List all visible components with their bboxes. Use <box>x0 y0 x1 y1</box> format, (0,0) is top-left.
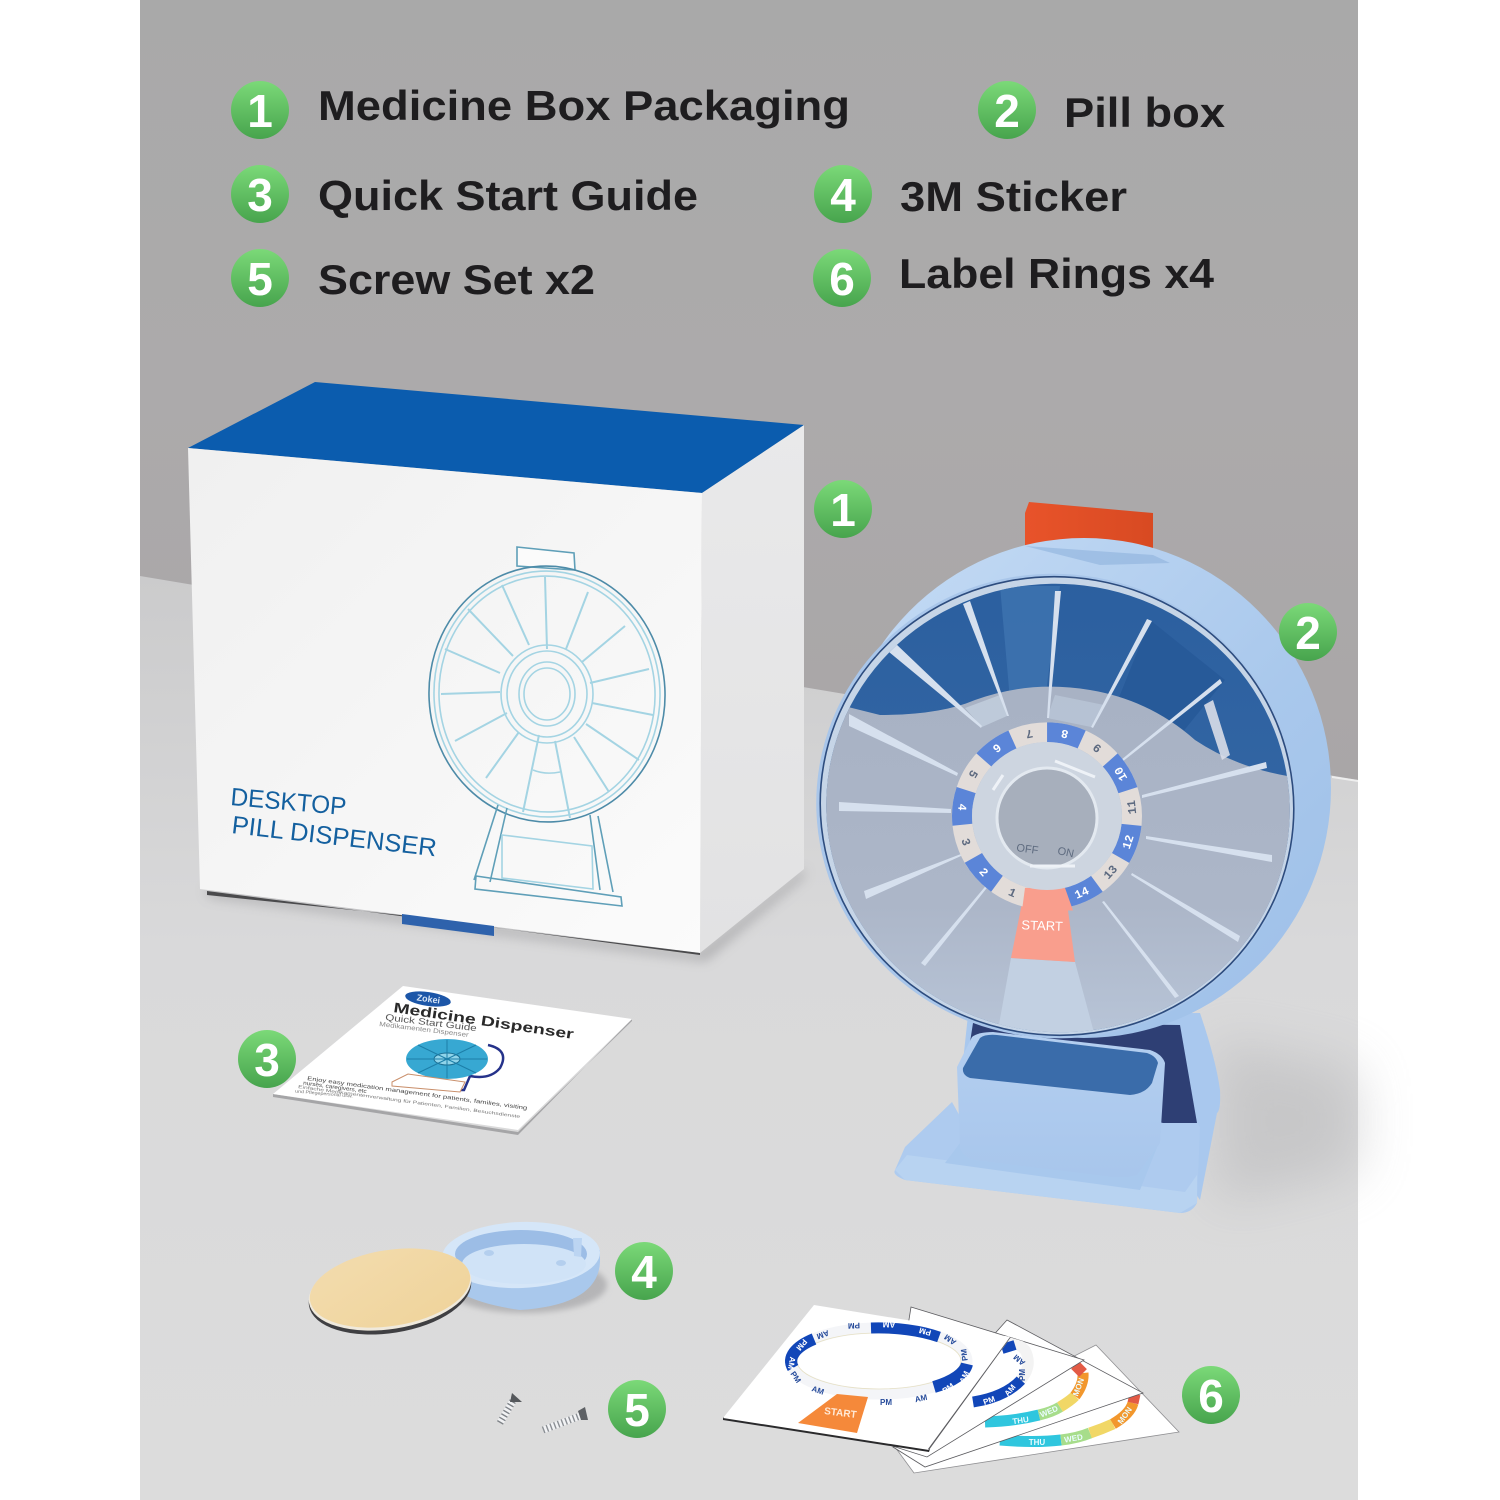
badge 5 callout <box>608 1380 666 1438</box>
box line art: pill dispenser drawing <box>422 547 672 906</box>
stand base plate <box>894 1102 1200 1213</box>
sheet one ring labels: PM <box>847 1321 860 1330</box>
white divider spokes <box>839 591 1272 998</box>
sheet two ring labels: PM <box>1018 1369 1027 1381</box>
start wedge <box>1011 888 1075 962</box>
sheet four day labels: MON <box>1116 1405 1134 1426</box>
booklet subtitle: Quick Start Guide <box>385 1012 477 1033</box>
sheet one ring labels: AM <box>958 1369 971 1385</box>
sheet one ring labels: PM <box>941 1381 956 1396</box>
ring numbers: 14 <box>1073 884 1091 903</box>
screw one <box>500 1393 522 1423</box>
sheet one ring labels: PM <box>794 1337 809 1352</box>
badge 1 callout <box>814 480 872 538</box>
box top face <box>188 382 804 493</box>
sheet three day labels: WED <box>1039 1404 1060 1419</box>
booklet body text: Einfache Medikamentenverwaltung für Patienten, Familien, Besuchsdienste <box>298 1084 521 1119</box>
legend label: 3M sticker: 3M Sticker <box>900 173 1127 220</box>
sheet four day labels: THU <box>1029 1438 1045 1447</box>
badge 4 <box>814 165 872 223</box>
3M sticker and mount <box>303 1219 607 1345</box>
booklet body text <box>295 1076 528 1119</box>
booklet sub line: Medikamenten Dispenser <box>379 1021 470 1039</box>
quick start guide booklet <box>273 986 632 1135</box>
central hub dial: ON <box>1056 845 1075 860</box>
ring numbers: 8 <box>1060 726 1070 741</box>
box side face <box>700 425 804 953</box>
sheet one ring labels: PM <box>918 1326 932 1337</box>
sheet four day labels <box>1029 1405 1134 1447</box>
ring numbers: 13 <box>1101 863 1121 883</box>
legend label: label rings: Label Rings x4 <box>899 250 1215 297</box>
ring numbers: 6 <box>989 740 1004 755</box>
badge 5: 5 <box>247 253 273 305</box>
badge 3: 3 <box>247 169 273 221</box>
badge 6 callout: 6 <box>1198 1370 1224 1422</box>
label sheet two <box>889 1307 1084 1457</box>
legend label: quick start guide: Quick Start Guide <box>318 172 698 219</box>
pill collection cup <box>957 1032 1165 1177</box>
ring on sheet one <box>791 1328 967 1394</box>
booklet logo <box>404 989 452 1009</box>
booklet wheel illustration <box>392 1039 503 1092</box>
sheet three day labels: MON <box>1071 1377 1086 1397</box>
sheet one ring labels: AM <box>815 1328 830 1341</box>
disc front rim <box>779 536 1333 1076</box>
legend label: medicine box packaging: Medicine Box Packaging <box>318 82 850 129</box>
lighter wall facets near hub <box>965 695 1007 727</box>
ring numbers: 9 <box>1090 740 1105 755</box>
ring numbers: 10 <box>1112 764 1131 783</box>
adhesive disc <box>303 1238 477 1345</box>
box label: desktop pill dispenser: DESKTOP <box>229 783 347 821</box>
pill box dispenser <box>779 502 1358 1213</box>
sheet one ring labels: AM <box>811 1384 825 1397</box>
sheet one ring labels: PM <box>880 1398 892 1407</box>
legend heading block <box>231 81 1226 307</box>
legend label: pill box: Pill box <box>1064 89 1226 136</box>
badge 5 <box>231 249 289 307</box>
ring numbers: 5 <box>965 767 980 780</box>
sheet one ring labels: AM <box>882 1320 895 1329</box>
badge 5 callout: 5 <box>624 1384 650 1436</box>
ring numbers: 11 <box>1125 799 1140 815</box>
numbered day ring <box>928 699 1166 933</box>
ring numbers: 1 <box>1006 886 1018 901</box>
sheet three day labels: THU <box>1012 1415 1030 1426</box>
badge 4: 4 <box>830 169 856 221</box>
booklet body text: Enjoy easy medication management for patients, families, visiting <box>307 1076 528 1112</box>
box front face <box>188 448 702 953</box>
booklet logo: Zokei <box>416 992 441 1006</box>
sheet one ring labels: PM <box>959 1348 970 1361</box>
wedge below start <box>999 958 1093 1032</box>
medicine box packaging <box>188 382 804 960</box>
badge 3 callout: 3 <box>254 1034 280 1086</box>
badge 6 <box>813 249 871 307</box>
badge 2 <box>978 81 1036 139</box>
label sheet four <box>895 1345 1179 1473</box>
screw set <box>500 1393 588 1430</box>
sheet one ring labels: AM <box>786 1356 797 1370</box>
disc rear housing <box>837 538 1331 1038</box>
dark neck cavity <box>965 1023 1197 1123</box>
disc interior compartments <box>826 584 1290 1032</box>
sheet one ring labels: AM <box>914 1393 928 1404</box>
sheet one ring labels: AM <box>942 1332 958 1347</box>
sheet two ring labels: AM <box>1003 1382 1018 1398</box>
badge 6: 6 <box>829 253 855 305</box>
badge 3 <box>231 165 289 223</box>
badge 3 callout <box>238 1030 296 1088</box>
red release button <box>1025 502 1153 557</box>
sheet four day labels: WED <box>1064 1432 1084 1445</box>
booklet title: Medicine Dispenser <box>393 999 576 1042</box>
legend label: screw set: Screw Set x2 <box>318 256 595 303</box>
badge 6 callout <box>1182 1366 1240 1424</box>
screw two <box>543 1407 588 1430</box>
badge 1 callout: 1 <box>830 484 856 536</box>
sheet one ring labels: PM <box>788 1370 803 1385</box>
booklet body text: nurses, caregivers, etc <box>303 1081 367 1095</box>
start wedge: START <box>1021 917 1063 934</box>
sheet two ring labels: AM <box>1011 1352 1027 1367</box>
box label: desktop pill dispenser <box>229 783 438 862</box>
ring numbers: 4 <box>954 803 969 811</box>
badge 1 <box>231 81 289 139</box>
ring numbers <box>954 726 1140 903</box>
badge 1: 1 <box>247 85 273 137</box>
label sheet three <box>893 1320 1143 1467</box>
badge 4 callout: 4 <box>631 1246 657 1298</box>
ring numbers: 7 <box>1024 726 1034 741</box>
label ring sheets <box>723 1305 1179 1473</box>
stand neck <box>960 1013 1220 1200</box>
mount holder <box>441 1219 601 1310</box>
booklet body text: und Pflegepersonal usw. <box>295 1089 353 1099</box>
cast shadow <box>1215 1040 1358 1205</box>
sheet three day labels <box>1012 1377 1086 1426</box>
start tab on sheet one <box>798 1394 868 1433</box>
ring numbers: 2 <box>975 865 991 880</box>
ring numbers: 3 <box>957 837 973 848</box>
badge 4 callout <box>615 1242 673 1300</box>
start tab on sheet one: START <box>823 1406 857 1421</box>
badge 2: 2 <box>994 85 1020 137</box>
badge 2 callout: 2 <box>1295 607 1321 659</box>
box label: desktop pill dispenser: PILL DISPENSER <box>230 811 438 862</box>
sheet two ring labels: PM <box>982 1394 997 1407</box>
sheet two ring labels <box>982 1352 1027 1407</box>
badge 2 callout <box>1279 603 1337 661</box>
sheet one ring labels <box>786 1320 971 1407</box>
label sheet one <box>723 1305 1011 1452</box>
ring numbers: 12 <box>1120 833 1138 851</box>
central hub dial: OFF <box>1016 842 1039 857</box>
central hub dial <box>972 742 1122 890</box>
